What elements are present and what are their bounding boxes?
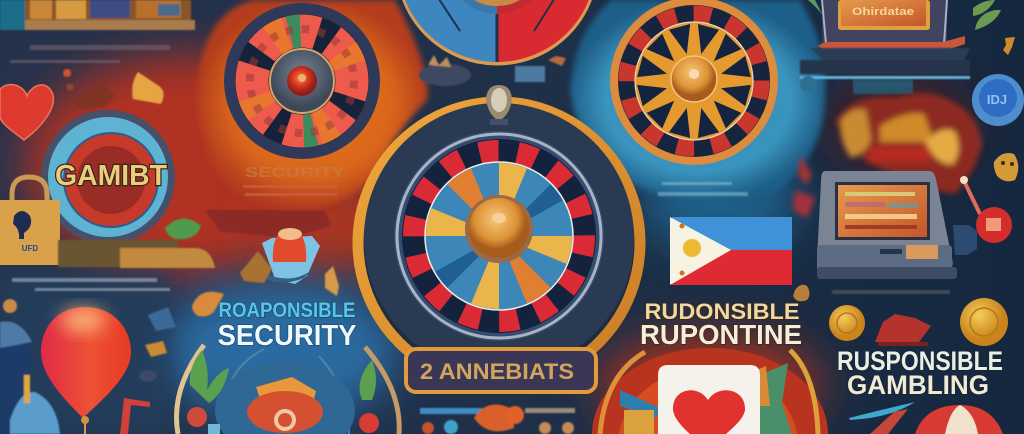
RESPONSIBLE SECURITY heading (218, 299, 356, 352)
small trinkets below top wheel (419, 55, 566, 86)
GAMIBT badge (41, 110, 175, 244)
feather / pen bottom right (849, 402, 915, 434)
faint SECURITY heading under left wheel: SECURITY (245, 164, 345, 181)
icon: heart left (0, 85, 53, 140)
right glow halo (570, 0, 826, 200)
GAMIBT badge label: GAMIBT (55, 160, 167, 192)
Philippine flag (670, 217, 792, 285)
faint SECURITY heading under left wheel (243, 164, 345, 196)
icon: heart on card (673, 390, 745, 434)
figure at far lower left (0, 299, 60, 434)
red card shape, bottom (120, 398, 150, 434)
left glow halo (197, 0, 428, 208)
bottom left circle with figure (176, 345, 399, 434)
coin face (994, 153, 1018, 181)
right wheel (610, 0, 778, 165)
shelf with pictures, top left (0, 0, 195, 30)
faint caption lines under right wheel (658, 182, 748, 196)
RESPONSIBLE GAMBLING heading (837, 346, 1003, 400)
RESPONSIBLE SECURITY heading: SECURITY (218, 320, 356, 352)
text lines, lower left (12, 278, 170, 291)
faint caption below laptop (832, 290, 950, 294)
top centre wheel (396, 0, 598, 65)
tan band with bag (58, 210, 331, 268)
centre wheel frame (353, 97, 645, 389)
controls below banner (420, 405, 575, 434)
banner text: 2 ANNEBIATS (420, 359, 574, 384)
top right slot monitor (808, 0, 1001, 54)
balloon (41, 307, 131, 434)
padlock: UFD (22, 244, 38, 253)
RESPONSIBLE RUPONTINE heading (640, 299, 802, 350)
centre banner (406, 349, 596, 392)
bottom heart emblem (592, 348, 828, 434)
blue button (972, 74, 1024, 126)
blue button: IDJ (987, 92, 1007, 107)
wheel finial on top (486, 85, 512, 125)
coins and red crate (829, 298, 1008, 346)
RESPONSIBLE GAMBLING heading: GAMBLING (847, 370, 989, 400)
small charm above gold coin heading (793, 285, 810, 301)
umbrella (915, 405, 1003, 434)
RESPONSIBLE RUPONTINE heading: RUPONTINE (640, 319, 802, 350)
faint caption lines, top left (10, 45, 170, 63)
padlock (0, 177, 60, 265)
top right slot monitor: Ohirdatae (852, 6, 914, 18)
laptop terminal (817, 171, 977, 279)
shelf beneath monitor (800, 48, 970, 94)
RESPONSIBLE RUPONTINE heading: RUDONSIBLE (644, 299, 800, 324)
RESPONSIBLE SECURITY heading: ROAPONSIBLE (218, 299, 356, 322)
fiery scene (793, 93, 982, 218)
joystick (960, 176, 1012, 243)
small golden charms (139, 251, 339, 382)
decorative sparks left (63, 69, 164, 110)
centre wheel (402, 139, 596, 333)
charm at far right (1003, 37, 1015, 55)
red cap with blue cloth (262, 228, 320, 284)
left wheel (224, 3, 380, 159)
